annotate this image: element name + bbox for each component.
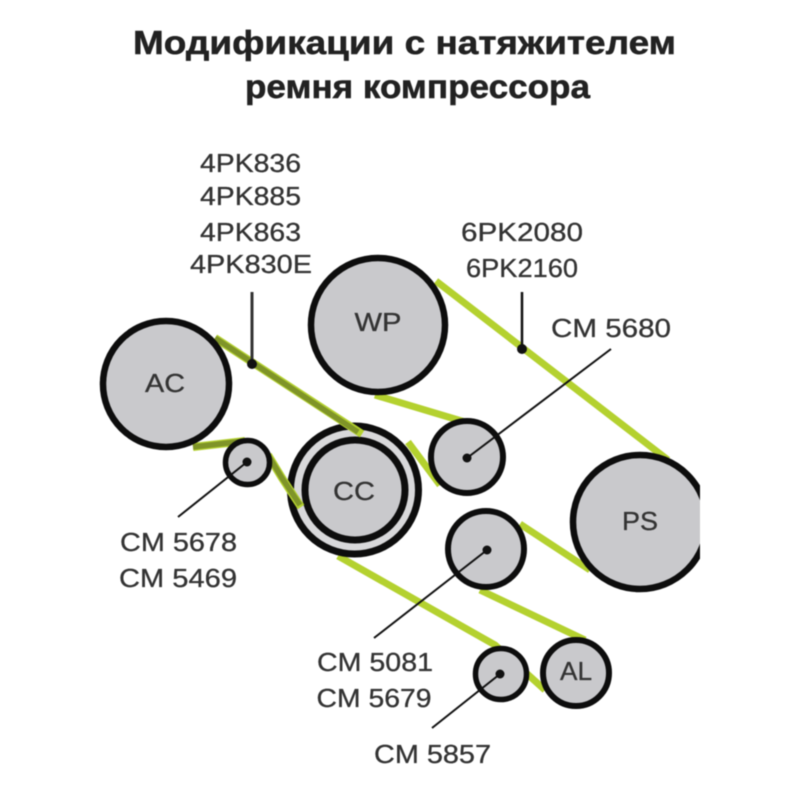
label: 4PK belts: 4PK885 (200, 181, 301, 211)
pulley: PS: PS (622, 506, 658, 536)
label: 4PK belts: 4PK863 (200, 217, 301, 247)
pulley: WP (311, 258, 445, 392)
label: CM 5081 / CM 5679 (316, 647, 433, 713)
label: CM 5680: CM 5680 (551, 313, 671, 343)
label: 4PK belts (190, 148, 312, 279)
pulley: WP: WP (354, 307, 402, 337)
leader: CM 5678 (178, 458, 252, 517)
title (133, 24, 676, 105)
leader: CM 5680 (462, 349, 611, 462)
pulley: tensioner CM 5081 (448, 511, 524, 587)
belt: inner olive belt (193, 338, 362, 507)
label: CM 5857: CM 5857 (374, 739, 491, 769)
leader: CM 5081 (374, 546, 492, 638)
label: 6PK belts: 6PK2080 (461, 217, 583, 247)
pulley: AC: AC (145, 368, 185, 398)
pulley: AC (103, 321, 229, 447)
leader: 4PK belts (247, 292, 257, 369)
label: 4PK belts: 4PK830E (190, 249, 312, 279)
label: CM 5081 / CM 5679: CM 5679 (316, 683, 432, 713)
title: Модификации с натяжителем (133, 24, 676, 61)
label: 6PK belts: 6PK2160 (466, 253, 578, 283)
pulley: CC (290, 426, 418, 554)
pulley: PS (573, 455, 707, 589)
label: CM 5678 / CM 5469: CM 5469 (119, 563, 237, 593)
pulley: CM 5857 (476, 648, 526, 700)
label: 6PK belts (461, 217, 583, 283)
pulley: tensioner CM 5680 (431, 421, 503, 493)
pulley: CC: CC (333, 476, 375, 506)
leader: CM 5857 (432, 670, 504, 728)
label: CM 5081 / CM 5679: CM 5081 (317, 647, 433, 677)
label: 4PK belts: 4PK836 (200, 148, 301, 178)
title: ремня компрессора (245, 68, 591, 105)
label: CM 5678 / CM 5469 (119, 527, 237, 593)
pulley: AL: AL (560, 656, 592, 686)
belt: outer green belt (338, 281, 668, 690)
pulley: AL (543, 640, 609, 706)
leader: 6PK belts (517, 292, 527, 354)
label: CM 5678 / CM 5469: CM 5678 (120, 527, 237, 557)
pulley: tensioner CM 5678 (226, 440, 270, 484)
